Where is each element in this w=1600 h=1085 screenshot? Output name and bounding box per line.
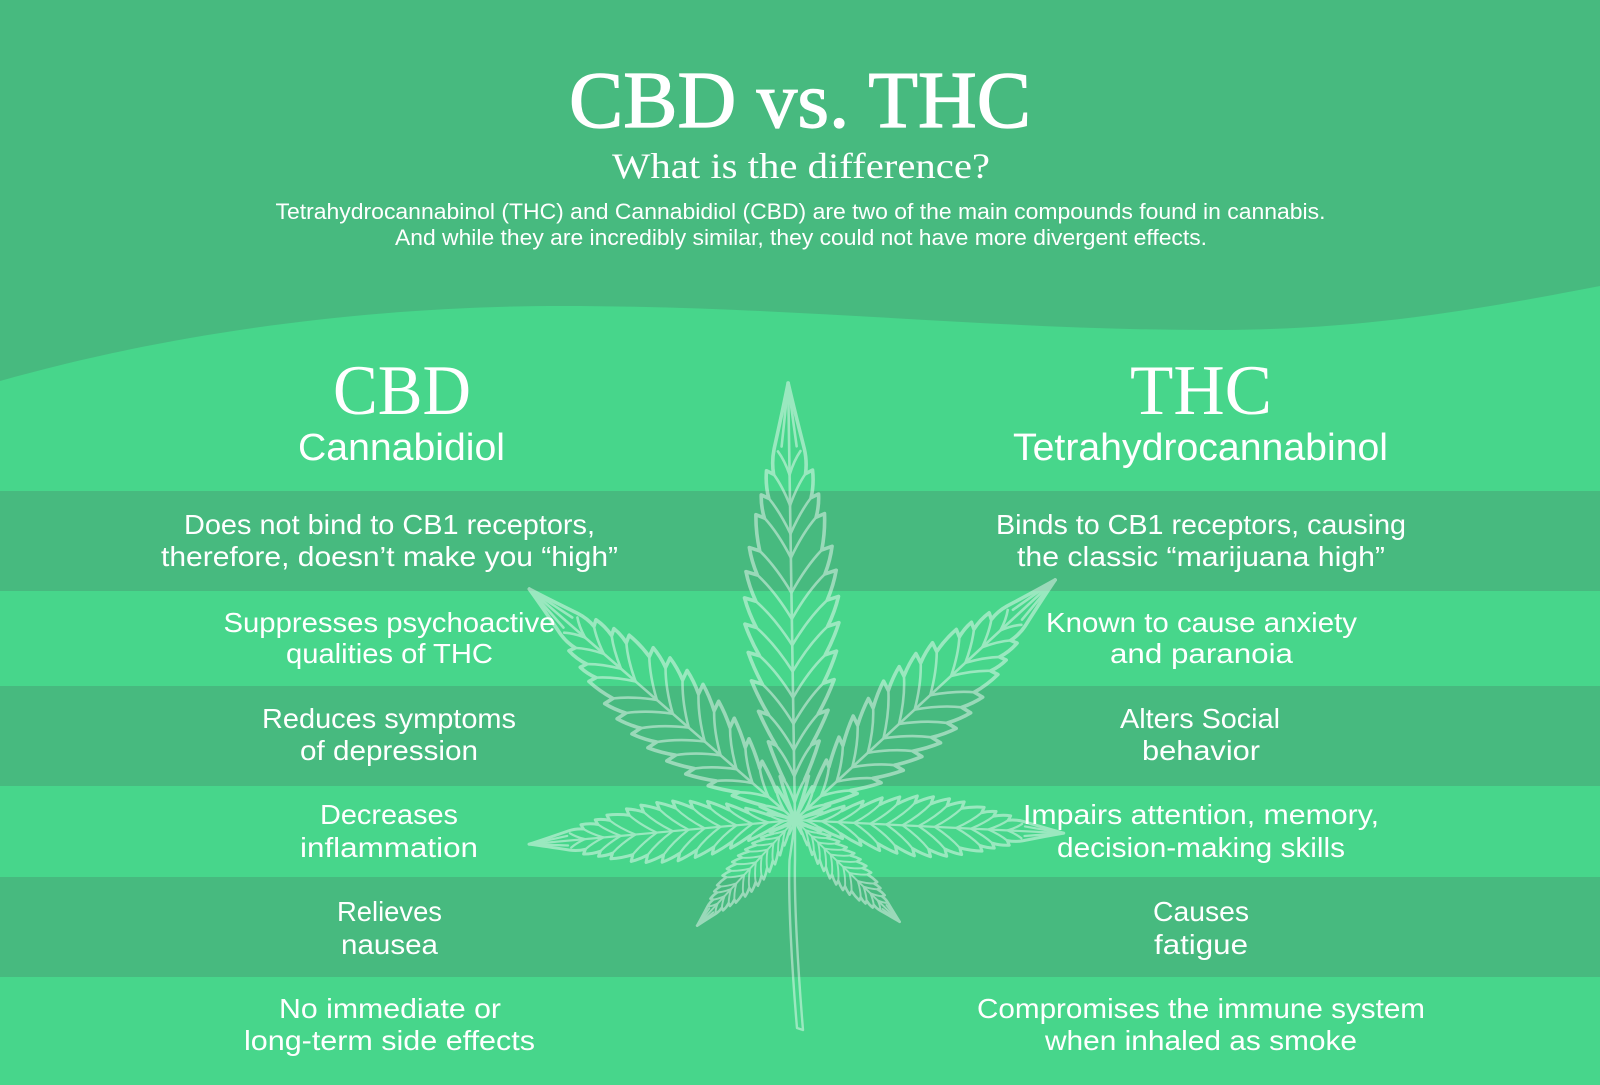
THC row 4 xyxy=(1023,799,1379,863)
CBD row 5 xyxy=(337,896,442,960)
leaflet: top xyxy=(741,382,842,821)
column heading: THC: THC xyxy=(1130,352,1272,430)
THC row 1: Binds to CB1 receptors, causing xyxy=(996,509,1406,540)
leaflet: upper right xyxy=(767,549,1084,851)
THC row 3: behavior xyxy=(1142,735,1260,766)
leaflet: upper left xyxy=(502,557,823,852)
CBD effects list xyxy=(161,509,618,1056)
intro paragraph xyxy=(276,199,1326,250)
intro paragraph: Tetrahydrocannabinol (THC) and Cannabidiol (CBD) are two of the main compounds found in cannabis. xyxy=(276,199,1326,224)
THC row 6: Compromises the immune system xyxy=(977,993,1425,1024)
THC row 2: and paranoia xyxy=(1110,638,1293,669)
column heading: THC: Tetrahydrocannabinol xyxy=(1013,427,1388,469)
CBD row 6 xyxy=(244,993,535,1056)
stem xyxy=(789,822,803,1030)
wave lower panel xyxy=(0,286,1600,1085)
THC row 6: when inhaled as smoke xyxy=(1044,1025,1357,1056)
THC row 1: the classic “marijuana high” xyxy=(1017,541,1385,572)
CBD row 3 xyxy=(262,703,516,766)
THC row 2: Known to cause anxiety xyxy=(1046,607,1357,638)
THC row 5 xyxy=(1153,896,1249,960)
leaflet: lower right xyxy=(783,807,912,934)
CBD row 2: Suppresses psychoactive xyxy=(224,607,556,638)
CBD row 4: Decreases xyxy=(320,799,458,830)
CBD row 2: qualities of THC xyxy=(286,638,493,669)
THC effects list xyxy=(977,509,1425,1056)
THC row 2 xyxy=(1046,607,1357,669)
intro paragraph: And while they are incredibly similar, they could not have more divergent effects. xyxy=(395,225,1207,250)
column heading: CBD: CBD xyxy=(333,352,471,430)
column heading: CBD xyxy=(298,352,505,469)
leaflet: right xyxy=(794,790,1065,863)
THC row 5: Causes xyxy=(1153,896,1249,927)
CBD row 6: No immediate or xyxy=(279,993,501,1024)
THC row 3: Alters Social xyxy=(1120,703,1280,734)
CBD row 1: therefore, doesn’t make you “high” xyxy=(161,541,618,572)
THC row 1 xyxy=(996,509,1406,572)
title: CBD vs. THC xyxy=(569,57,1031,145)
column heading: CBD: Cannabidiol xyxy=(298,427,505,469)
subtitle: What is the difference? xyxy=(612,146,990,186)
CBD row 3: Reduces symptoms xyxy=(262,703,516,734)
CBD row 6: long-term side effects xyxy=(244,1025,535,1056)
THC row 4: Impairs attention, memory, xyxy=(1023,799,1379,830)
CBD row 5: Relieves xyxy=(337,896,442,927)
table row bands xyxy=(0,491,1600,977)
CBD row 2 xyxy=(224,607,556,669)
column heading: THC xyxy=(1013,352,1388,469)
leaflet: left xyxy=(526,790,798,874)
CBD row 3: of depression xyxy=(300,735,478,766)
THC row 5: fatigue xyxy=(1154,929,1248,960)
CBD row 1: Does not bind to CB1 receptors, xyxy=(184,509,595,540)
THC row 6 xyxy=(977,993,1425,1056)
CBD row 4: inflammation xyxy=(300,832,478,863)
THC row 4: decision-making skills xyxy=(1057,832,1345,863)
CBD row 4 xyxy=(300,799,478,863)
leaflet: lower left xyxy=(684,808,808,938)
THC row 3 xyxy=(1120,703,1280,766)
CBD row 5: nausea xyxy=(341,929,438,960)
CBD row 1 xyxy=(161,509,618,572)
cannabis leaf illustration xyxy=(502,382,1084,1030)
